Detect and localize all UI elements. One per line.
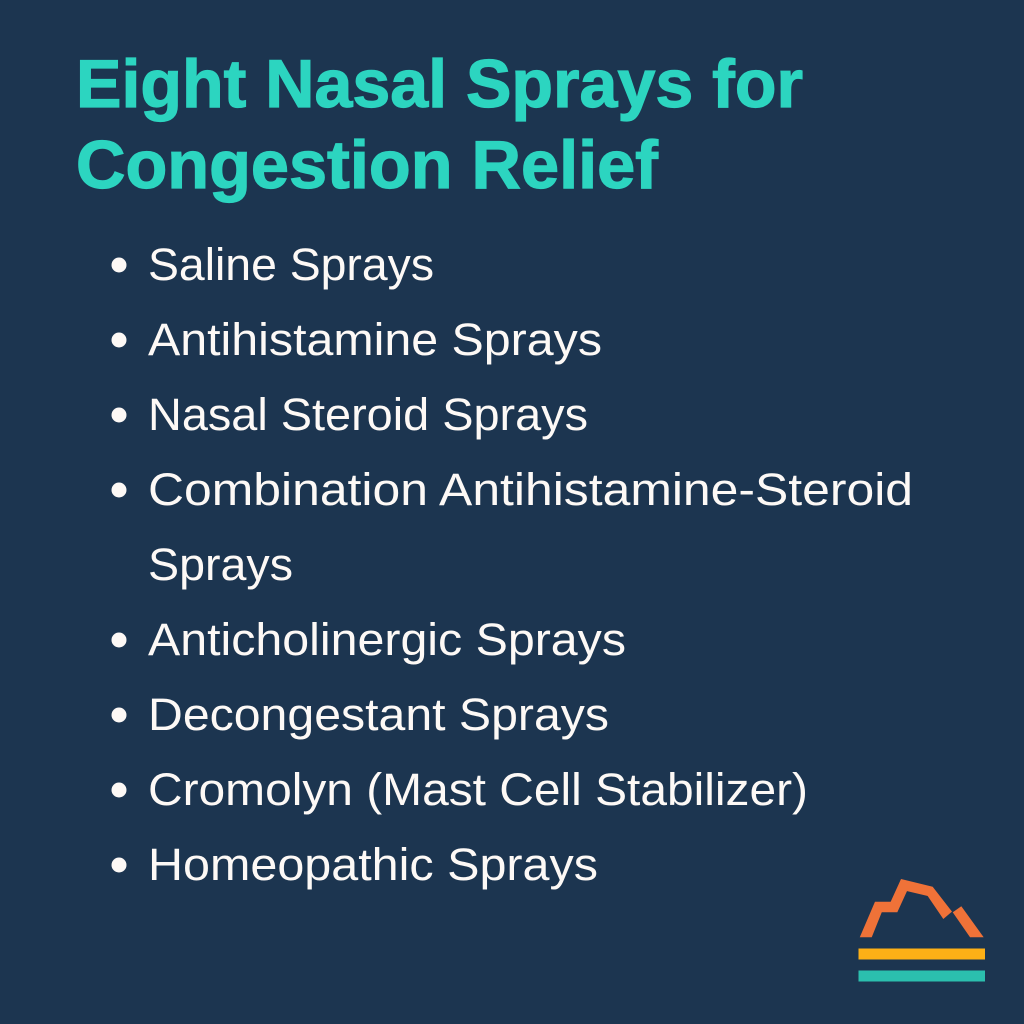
bulleted list of nasal sprays bbox=[112, 239, 913, 890]
list item: decongestant sprays: Decongestant Sprays bbox=[148, 689, 609, 740]
title: Eight Nasal Sprays for bbox=[76, 46, 803, 122]
icon: mountain logo bbox=[858, 880, 985, 982]
list item: saline sprays: Saline Sprays bbox=[148, 239, 434, 290]
list item: combination antihistamine-steroid sprays: Combination Antihistamine-Steroid bbox=[148, 464, 913, 515]
list item: homeopathic sprays: Homeopathic Sprays bbox=[148, 839, 598, 890]
list item: combination antihistamine-steroid sprays: Sprays bbox=[148, 539, 293, 590]
list item: nasal steroid sprays: Nasal Steroid Sprays bbox=[148, 389, 588, 440]
title: Congestion Relief bbox=[76, 127, 658, 203]
list item: antihistamine sprays: Antihistamine Sprays bbox=[148, 314, 602, 365]
title bbox=[76, 46, 803, 203]
list item: combination antihistamine-steroid sprays bbox=[112, 464, 913, 590]
list item: cromolyn: Cromolyn (Mast Cell Stabilizer) bbox=[148, 764, 808, 815]
list item: anticholinergic sprays: Anticholinergic Sprays bbox=[148, 614, 626, 665]
